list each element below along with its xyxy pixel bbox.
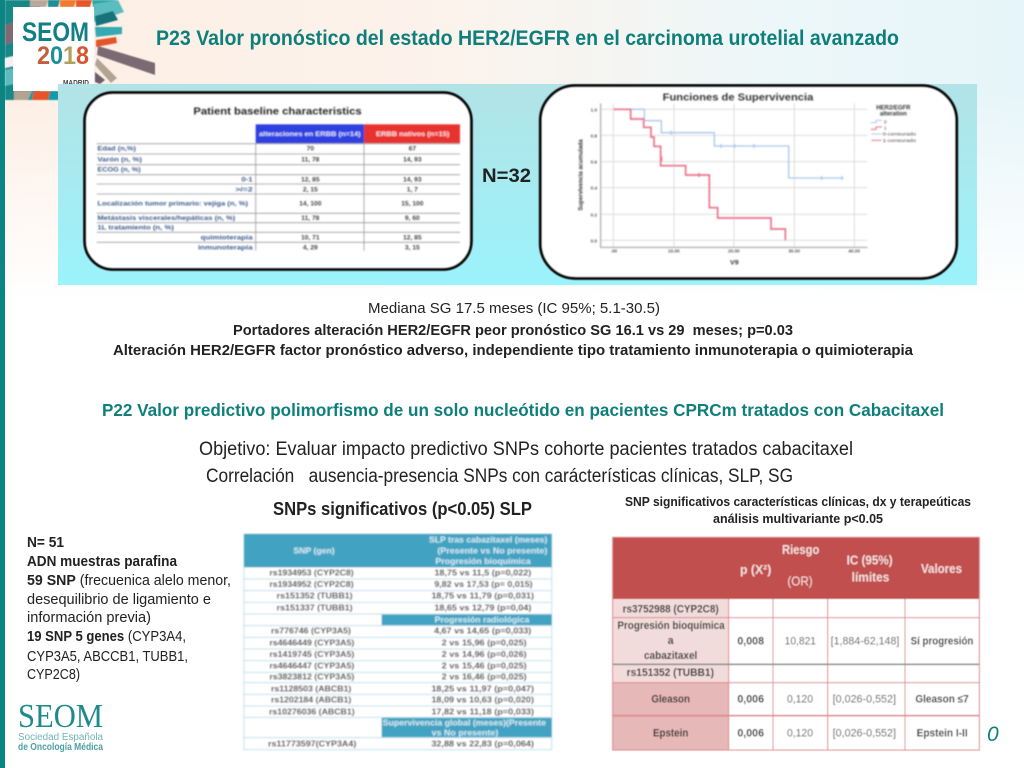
table: SNPs SLP: rs10276036 (ABCB1) (269, 706, 355, 716)
table: SNPs SLP: rs3823812 (CYP3A5) (269, 672, 355, 682)
table: SNPs SLP: rs1934953 (CYP2C8) (269, 567, 354, 577)
table: multivariate analysis: p (X²) (740, 563, 771, 577)
table: multivariate analysis: Sí progresión (911, 636, 973, 648)
P23 results text: Alteración HER2/EGFR factor pronóstico adverso, independiente tipo tratamiento inmunoterapia o quimioterapia (113, 342, 914, 359)
table: multivariate analysis (613, 537, 979, 750)
table: patient baseline characteristics: 14, 100 (299, 201, 322, 208)
slide number fragment: 0 (987, 723, 999, 746)
table: multivariate analysis: Gleason (651, 693, 690, 705)
table: multivariate analysis: 0,120 (787, 728, 813, 740)
heading: P22: P22 Valor predictivo polimorfismo de un solo nucleótido en pacientes CPRCm tratados con Cabacitaxel (102, 400, 944, 420)
table: patient baseline characteristics: 11, 78 (301, 215, 320, 222)
SEOM society logo (18, 698, 103, 753)
chart: survival curves: HER2/EGFR (876, 105, 911, 111)
table: multivariate analysis: 0,006 (737, 728, 764, 740)
table: SNPs SLP: 18,75 vs 11,79 (p=0,031) (431, 591, 534, 601)
SEOM 2018 logo: MADRID (63, 80, 89, 87)
chart: survival curves: 30.00 (788, 249, 800, 254)
table: patient baseline characteristics: 12, 85 (301, 176, 320, 183)
chart: survival curves: 0-censurado (883, 132, 917, 137)
SEOM 2018 logo: SEOM (22, 17, 89, 47)
table: patient baseline characteristics: 3, 15 (405, 244, 420, 251)
table: patient baseline characteristics: alteraciones en ERBB (n=14) (259, 131, 361, 138)
table: SNPs SLP: 9,82 vs 17,53 (p= 0,015) (434, 579, 533, 589)
P22 objective text: Correlación ausencia-presencia SNPs con carácterísticas clínicas, SLP, SG (206, 466, 793, 487)
table: multivariate analysis: Progresión bioquímica (617, 620, 725, 632)
table: patient baseline characteristics: 0-1 (241, 176, 253, 183)
N=32 label: N=32 (482, 166, 531, 187)
table: multivariate analysis: Epstein (653, 728, 688, 740)
SEOM society logo: SEOM (18, 698, 103, 735)
table: SNPs SLP: SNP (gen) (293, 545, 335, 555)
table: patient baseline characteristics: ERBB nativos (n=15) (376, 131, 449, 138)
chart: survival curves (540, 86, 957, 278)
P22 objective text: Objetivo: Evaluar impacto predictivo SNPs cohorte pacientes tratados cabacitaxel (199, 439, 853, 460)
table: SNPs SLP: SLP tras cabazitaxel (meses) (429, 534, 548, 544)
table: patient baseline characteristics: Metástasis viscerales/hepáticas (n, %) (97, 215, 235, 222)
SEOM society logo: Sociedad Española (18, 732, 103, 743)
table: multivariate analysis: límites (852, 571, 889, 585)
table: SNPs SLP: 18,25 vs 11,97 (p=0,047) (431, 683, 534, 693)
table: SNPs SLP (244, 534, 552, 750)
chart: survival curves: Supervivencia acumulada (578, 139, 585, 211)
P22 objective text (199, 439, 853, 487)
table: multivariate analysis: 0,006 (737, 693, 764, 705)
table: patient baseline characteristics: 15, 100 (401, 201, 424, 208)
table: SNPs SLP: rs1934952 (CYP2C8) (269, 579, 354, 589)
chart: survival curves: Funciones de Supervivencia (663, 93, 814, 104)
SEOM society logo: de Oncología Médica (18, 742, 103, 753)
table: patient baseline characteristics: 12, 85 (403, 234, 422, 241)
P23 results text (113, 300, 914, 359)
study details text: 59 SNP (frecuenica alelo menor, (27, 573, 231, 589)
heading: multivariate SNPs (625, 494, 971, 526)
table: SNPs SLP: rs4646447 (CYP3A5) (269, 660, 355, 670)
table: SNPs SLP: rs1419745 (CYP3A5) (269, 649, 355, 659)
SEOM 2018 logo (13, 7, 94, 91)
table: SNPs SLP: 18,75 vs 11,5 (p=0,022) (434, 567, 532, 577)
table: SNPs SLP: vs No presente) (432, 728, 499, 738)
table: multivariate analysis: rs3752988 (CYP2C8) (623, 604, 719, 616)
table: multivariate analysis: a (668, 635, 674, 647)
table: SNPs SLP: Progresión radiológica (435, 614, 530, 624)
study details text (27, 535, 231, 683)
chart: survival curves: 0.0 (591, 238, 598, 243)
table: SNPs SLP: 2 vs 14,96 (p=0,026) (442, 649, 527, 659)
table: multivariate analysis: [1,884-62,148] (831, 636, 899, 648)
table: patient baseline characteristics: ECOG (n, %) (97, 167, 141, 174)
table: multivariate analysis: [0,026-0,552] (833, 728, 896, 740)
study details text: 19 SNP 5 genes (CYP3A4, (27, 629, 186, 645)
table: SNPs SLP: 2 vs 16,46 (p=0,025) (442, 672, 527, 682)
table: patient baseline characteristics: 11, 78 (301, 156, 320, 163)
chart: survival curves: 40.00 (848, 249, 860, 254)
table: patient baseline characteristics: >/=2 (235, 186, 253, 193)
table: SNPs SLP: rs151352 (TUBB1) (277, 591, 353, 601)
chart: survival curves: 10.00 (668, 249, 680, 254)
table: multivariate analysis: 0,120 (787, 693, 813, 705)
table: patient baseline characteristics: inmunoterapia (198, 244, 253, 251)
table: SNPs SLP: rs776746 (CYP3A5) (271, 626, 351, 636)
table: patient baseline characteristics: Varón (n, %) (97, 156, 142, 163)
table: SNPs SLP: Progresión bioquímica (435, 556, 531, 566)
table: patient baseline characteristics: 9, 60 (405, 215, 420, 222)
table: SNPs SLP: 18,65 vs 12,79 (p=0,04) (434, 602, 532, 612)
heading: multivariate SNPs: SNP significativos características clínicas, dx y terapeúticas (625, 494, 971, 509)
table: patient baseline characteristics: 14, 93 (403, 156, 422, 163)
P23 results text: Mediana SG 17.5 meses (IC 95%; 5.1-30.5) (368, 300, 660, 317)
table: SNPs SLP: rs11773597(CYP3A4) (268, 738, 357, 748)
P23 results text: Portadores alteración HER2/EGFR peor pronóstico SG 16.1 vs 29 meses; p=0.03 (233, 322, 793, 339)
table: SNPs SLP: 17,82 vs 11,18 (p=0,033) (431, 706, 534, 716)
table: patient baseline characteristics: 4, 29 (303, 244, 318, 251)
study details text: información previa) (27, 610, 151, 626)
table: patient baseline characteristics (85, 93, 471, 269)
table: patient baseline characteristics: 14, 93 (403, 176, 422, 183)
table: multivariate analysis: 0,008 (737, 636, 764, 648)
table: multivariate analysis: IC (95%) (847, 553, 893, 567)
chart: survival curves: alteration (880, 111, 907, 117)
table: SNPs SLP: rs1202184 (ABCB1) (271, 695, 352, 705)
table: SNPs SLP: 2 vs 15,96 (p=0,025) (442, 637, 527, 647)
chart: survival curves: 0 (884, 120, 887, 125)
table: multivariate analysis: 10,821 (785, 636, 816, 648)
decorative ray graphic behind logo (5, 0, 155, 100)
table: patient baseline characteristics: Edad (n,%) (97, 145, 136, 152)
chart: survival curves: 1 (884, 126, 887, 131)
table: SNPs SLP: rs4646449 (CYP3A5) (269, 637, 355, 647)
study details text: CYP3A5, ABCCB1, TUBB1, (27, 649, 188, 665)
chart: survival curves: 1-censurado (883, 138, 917, 143)
table: patient baseline characteristics: Patient baseline characteristics (193, 106, 362, 117)
table: patient baseline characteristics: 2, 15 (303, 186, 318, 193)
chart: survival curves: V9 (730, 259, 739, 266)
table: multivariate analysis: Valores (921, 562, 962, 576)
chart: survival curves: 0.6 (591, 160, 598, 165)
table: multivariate analysis: Gleason ≤7 (915, 693, 969, 705)
chart: survival curves: 20.00 (728, 249, 740, 254)
table: multivariate analysis: cabazitaxel (644, 650, 697, 662)
title: P23 Valor pronóstico del estado HER2/EGFR en el carcinoma urotelial avanzado (156, 26, 899, 50)
table: SNPs SLP: rs151337 (TUBB1) (277, 602, 353, 612)
table: SNPs SLP: (Presente vs No presente) (437, 545, 548, 555)
chart: survival curves: 0.2 (591, 212, 598, 217)
table: multivariate analysis: Epstein I-II (917, 728, 968, 740)
study details text: CYP2C8) (27, 667, 80, 683)
study details text: ADN muestras parafina (27, 554, 178, 570)
table: patient baseline characteristics: quimioterapia (201, 234, 253, 241)
table: patient baseline characteristics: 1, 7 (407, 186, 418, 193)
SEOM 2018 logo: 2018 (37, 42, 89, 70)
table: patient baseline characteristics: 10, 71 (301, 234, 320, 241)
study details text: N= 51 (27, 535, 64, 551)
table: SNPs SLP: 18,09 vs 10,63 (p=0,020) (431, 695, 534, 705)
chart: survival curves: 1.0 (591, 107, 598, 112)
table: SNPs SLP: 2 vs 15,46 (p=0,025) (442, 660, 527, 670)
chart: survival curves: .00 (611, 249, 618, 254)
chart: survival curves: 0.4 (591, 186, 598, 191)
panel: figures band (58, 84, 977, 285)
table: SNPs SLP: 32,88 vs 22,83 (p=0,064) (431, 738, 534, 748)
heading: significant SNPs SLP: SNPs significativos (p<0.05) SLP (273, 499, 532, 519)
table: patient baseline characteristics: Localización tumor primario: vejiga (n, %) (97, 201, 248, 208)
study details text: desequilibrio de ligamiento e (27, 592, 211, 608)
table: patient baseline characteristics: 67 (409, 145, 416, 152)
table: SNPs SLP: Supervivencia global (meses)(Presente (383, 718, 546, 728)
table: multivariate analysis: Riesgo (782, 543, 820, 557)
heading: multivariate SNPs: análisis multivariante p<0.05 (713, 511, 883, 526)
table: patient baseline characteristics: 70 (307, 145, 314, 152)
table: multivariate analysis: rs151352 (TUBB1) (627, 667, 714, 679)
table: patient baseline characteristics: 1L tratamiento (n, %) (97, 225, 174, 232)
chart: survival curves: 0.8 (591, 133, 598, 138)
table: multivariate analysis: (OR) (787, 575, 813, 589)
table: multivariate analysis: [0,026-0,552] (833, 693, 896, 705)
table: SNPs SLP: rs1128503 (ABCB1) (271, 683, 352, 693)
table: SNPs SLP: 4,67 vs 14,65 (p=0,033) (434, 626, 532, 636)
